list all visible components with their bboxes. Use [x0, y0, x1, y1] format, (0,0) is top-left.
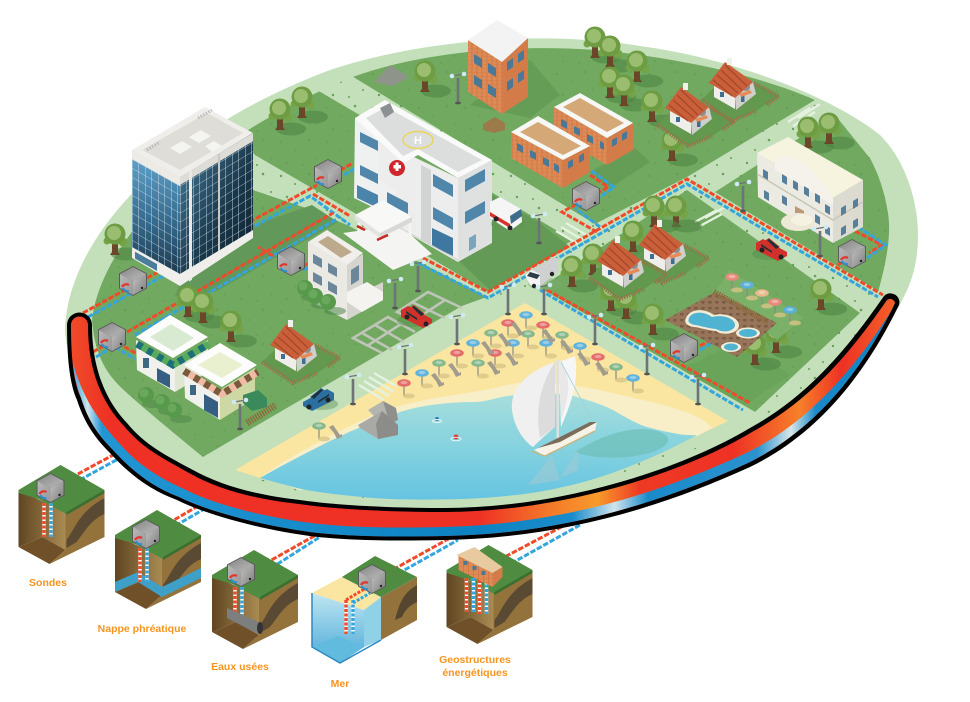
- helipad: H: [414, 135, 422, 147]
- substation boxes: [98, 159, 866, 363]
- brick building low front: [511, 116, 590, 188]
- pipe network: [83, 163, 886, 410]
- shop green awning: [136, 315, 209, 392]
- residential building: [297, 230, 383, 320]
- brick building tall: [468, 20, 528, 133]
- sailboat: [512, 356, 597, 456]
- ambulance: [490, 197, 525, 231]
- label Sondes: Sondes: [29, 577, 67, 589]
- source block: Géostructures: [446, 545, 532, 644]
- label Geostructures énergétiques: énergétiques: [442, 667, 508, 679]
- grass blocks: [92, 48, 890, 498]
- trees: [104, 26, 855, 370]
- source block: Nappe phréatique: [115, 510, 201, 609]
- beach: [235, 303, 728, 500]
- office tower: [132, 107, 253, 287]
- beach umbrellas and chairs: [312, 311, 644, 442]
- heat pipe ring: [67, 293, 899, 541]
- tent rock at top: [374, 65, 409, 86]
- shop brown awning: [184, 343, 258, 420]
- hospital: [343, 100, 492, 270]
- pedestrian crossings and parking: [353, 104, 820, 400]
- label Geostructures énergétiques: Geostructures: [439, 654, 511, 666]
- labels: [29, 577, 511, 690]
- mansion: [757, 137, 863, 243]
- lamp at top: [450, 72, 466, 104]
- red car in parking: [397, 305, 432, 328]
- red cross sign: [389, 160, 405, 176]
- connections to source blocks: [65, 455, 580, 577]
- sea: [260, 394, 697, 500]
- red car on road: [752, 238, 787, 261]
- road mask beside beach: [203, 288, 755, 480]
- blue car: [303, 388, 338, 411]
- ground disc: [65, 38, 918, 508]
- helipad: [403, 132, 433, 148]
- label Nappe phréatique: Nappe phréatique: [98, 623, 186, 635]
- brick building low back: [554, 93, 633, 165]
- label Mer: Mer: [331, 678, 349, 690]
- rocks: [358, 401, 398, 439]
- pool terrace: [665, 270, 803, 357]
- houses: [262, 58, 779, 383]
- entrance canopy: [355, 200, 412, 252]
- source block: Eaux usées: [212, 550, 298, 649]
- swimmers: [432, 417, 461, 441]
- source block: Sondes: [18, 465, 104, 564]
- dumpster and fence: [243, 390, 276, 423]
- shops: [136, 315, 276, 430]
- white van: [525, 258, 562, 290]
- source block: Mer: [312, 556, 417, 663]
- street lamps: [345, 180, 828, 405]
- label Eaux usées: Eaux usées: [211, 661, 269, 673]
